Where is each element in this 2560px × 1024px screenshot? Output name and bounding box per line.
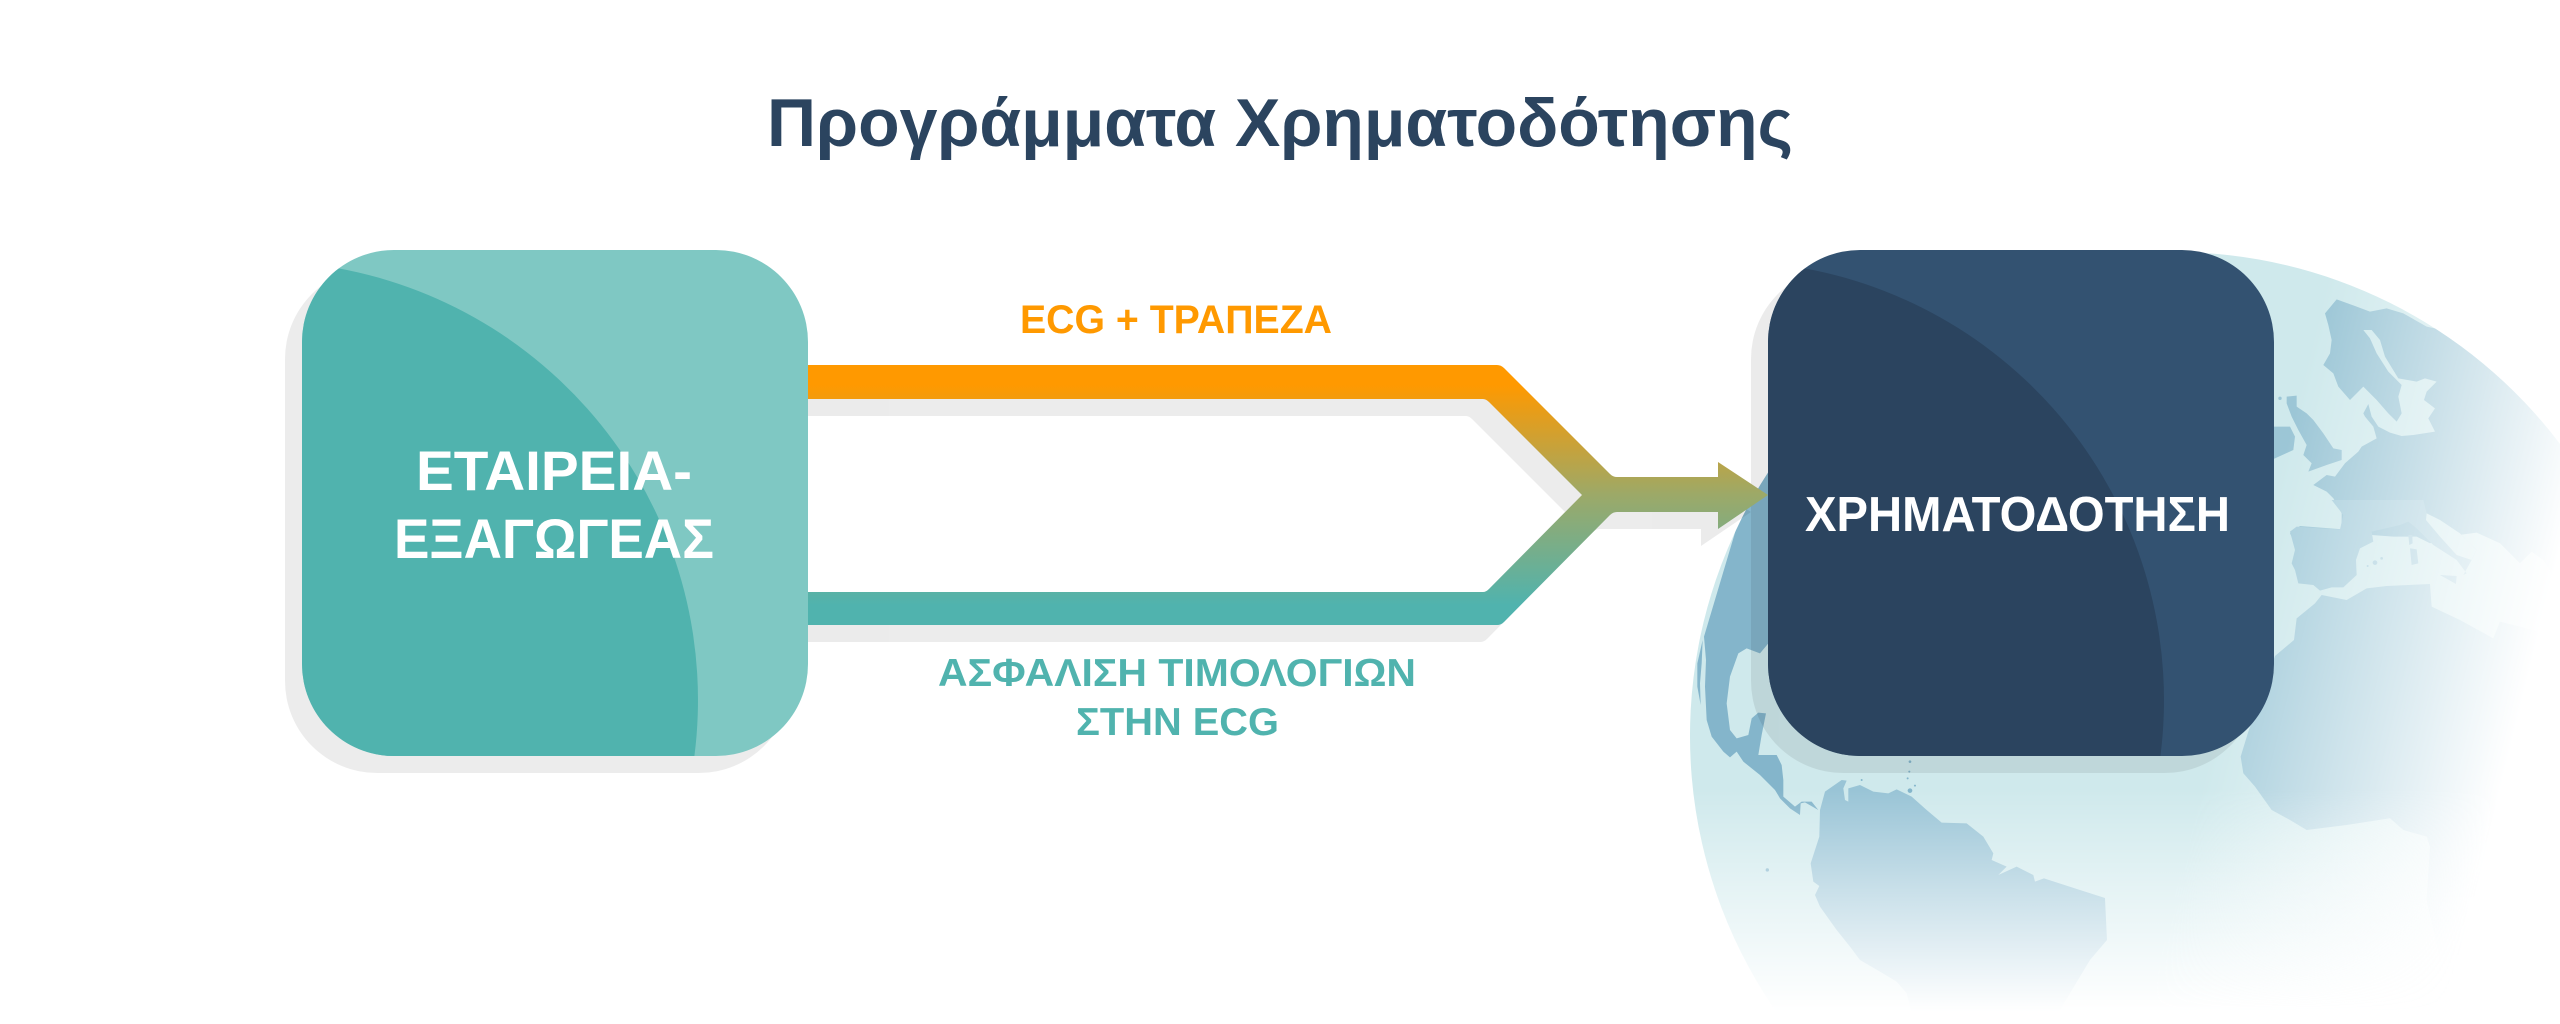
continent: South America (1810, 780, 2107, 978)
continent: Great Britain and Ireland (2270, 396, 2342, 472)
continent: Iberia, Italy and Mediterranean coast (2290, 500, 2477, 591)
shadows of boxes and arrow (285, 267, 2257, 773)
continent: Eurasia (2290, 300, 2545, 552)
box darker arc (302, 268, 698, 756)
arrow: merging financing flows (808, 365, 1768, 625)
label: invoice insurance (938, 652, 1416, 744)
box background (302, 250, 808, 756)
box text: ΕΞΑΓΩΓΕΑΣ (394, 507, 714, 570)
continent: Africa (2240, 584, 2476, 832)
box text (394, 439, 714, 570)
continent: North and Central America (1697, 460, 1916, 872)
box text: ΧΡΗΜΑΤΟΔΟΤΗΣΗ (1805, 488, 2230, 542)
box background (1768, 250, 2274, 756)
box text: ΕΤΑΙΡΕΙΑ- (416, 439, 692, 502)
globe with continents (1680, 240, 2560, 1024)
label: invoice insurance: ΣΤΗΝ ECG (1076, 701, 1279, 744)
continent: Adriatic sea gap (2426, 513, 2477, 560)
panel: exporter company (302, 250, 808, 756)
box darker arc (1768, 268, 2164, 756)
label: ECG + bank: ECG + ΤΡΑΠΕΖΑ (1020, 298, 1332, 342)
label: invoice insurance: ΑΣΦΑΛΙΣΗ ΤΙΜΟΛΟΓΙΩΝ (938, 652, 1416, 695)
ocean (1690, 253, 2506, 972)
title: Προγράμματα Χρηματοδότησης (767, 85, 1793, 161)
panel: financing (1768, 250, 2274, 756)
